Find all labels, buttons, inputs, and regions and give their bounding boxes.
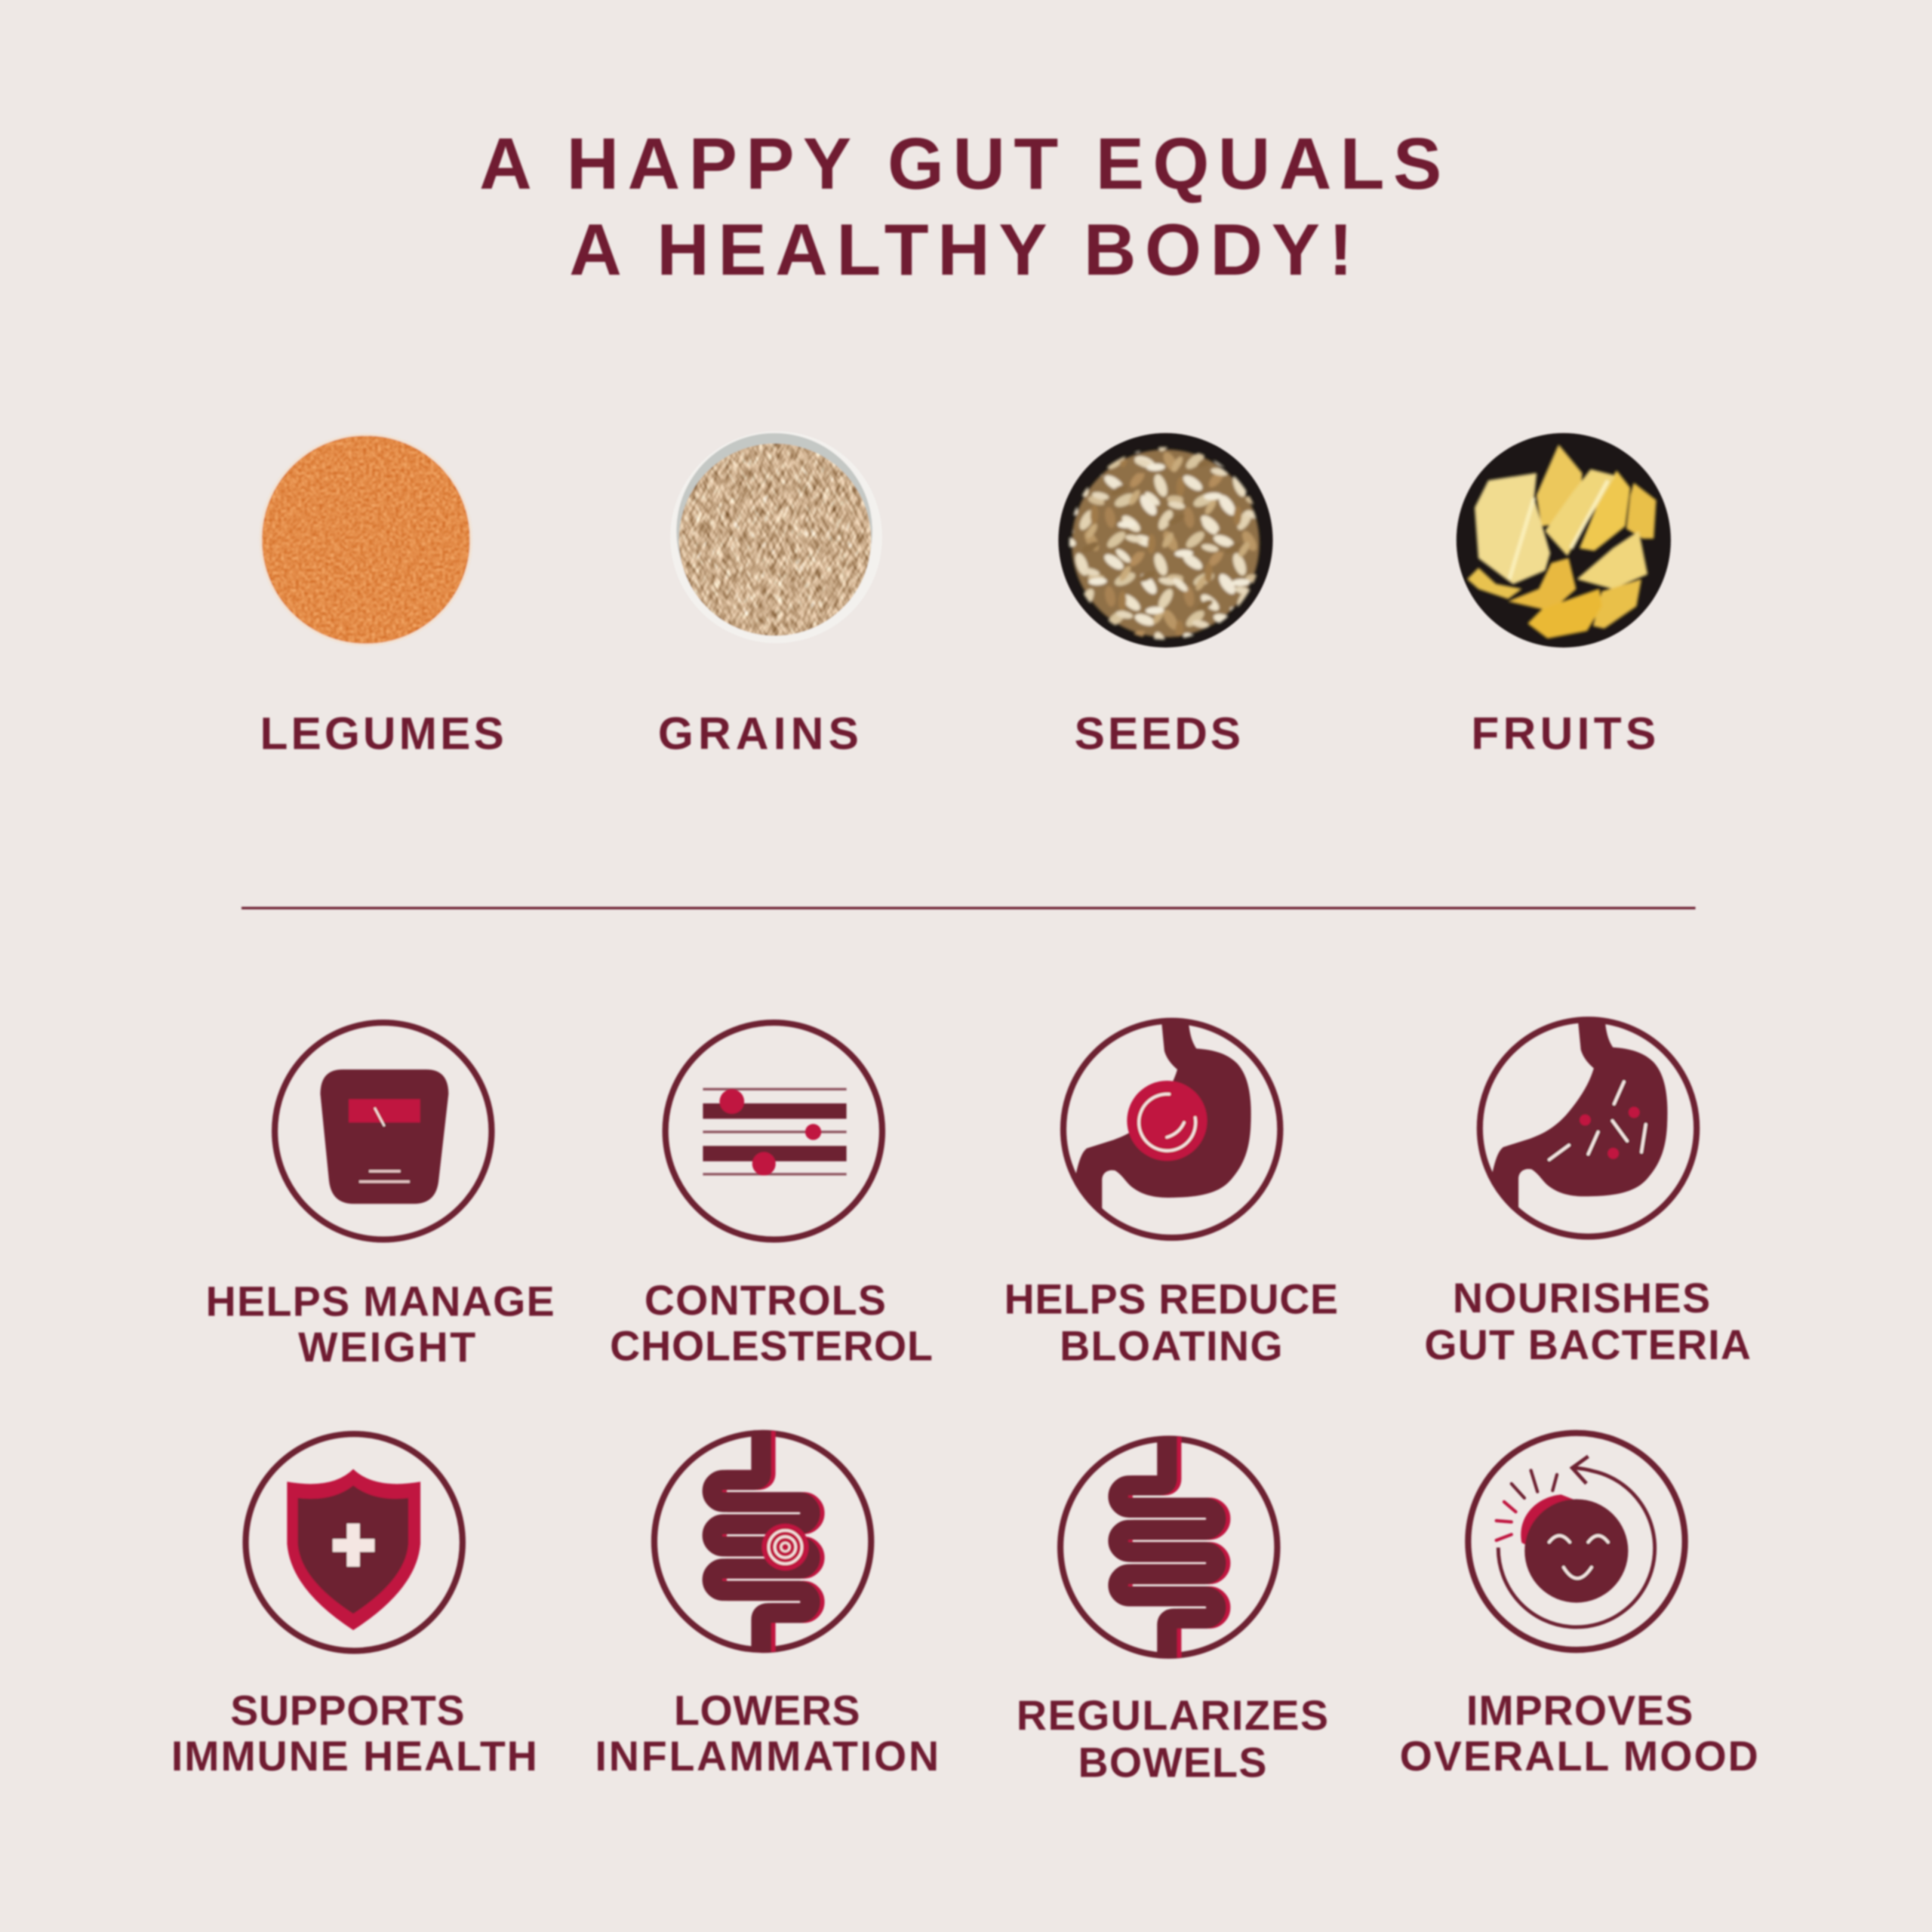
label: improves overall mood [1400,1687,1758,1780]
icon: stomach with bloating [1063,1013,1280,1238]
label: helps reduce bloating [1004,1275,1338,1369]
label: supports immune health: SUPPORTS [230,1687,465,1734]
title: A HAPPY GUT EQUALS [479,124,1441,205]
title: A HEALTHY BODY! [569,210,1353,291]
label: lowers inflammation [595,1687,939,1780]
label: nourishes gut bacteria: NOURISHES [1453,1275,1710,1321]
label: helps reduce bloating: BLOATING [1060,1322,1283,1369]
icon: stomach with gut bacteria [1480,1011,1697,1237]
food: pineapple in black bowl [1457,433,1671,648]
icon: immune shield [246,1434,463,1651]
icon: smiling face with mood arrow [1468,1433,1685,1650]
label: helps manage weight: WEIGHT [298,1324,475,1371]
label: controls cholesterol [610,1277,933,1369]
label: regularizes bowels: BOWELS [1078,1739,1266,1786]
title [479,124,1441,291]
label: fruits: FRUITS [1471,708,1656,759]
label: controls cholesterol: CHOLESTEROL [610,1322,933,1369]
food: grains in white bowl [623,389,924,692]
label: nourishes gut bacteria: GUT BACTERIA [1424,1321,1751,1368]
label: nourishes gut bacteria [1424,1275,1751,1368]
label: supports immune health [171,1687,537,1780]
label: regularizes bowels: REGULARIZES [1017,1692,1328,1739]
label: lowers inflammation: LOWERS [674,1687,860,1734]
panel: health benefits [171,1011,1758,1786]
label: lowers inflammation: INFLAMMATION [595,1733,939,1780]
icon: intestine with inflammation [654,1424,871,1658]
label: improves overall mood: IMPROVES [1466,1687,1693,1734]
label: legumes: LEGUMES [260,708,504,759]
icon: weight scale [275,1023,491,1239]
label: regularizes bowels [1017,1692,1328,1786]
panel: fibre food sources [260,389,1671,759]
icon: regular bowels [1060,1429,1277,1663]
label: helps manage weight: HELPS MANAGE [206,1278,555,1325]
icon: cholesterol arteries [666,1023,882,1239]
label: supports immune health: IMMUNE HEALTH [171,1733,537,1780]
label: improves overall mood: OVERALL MOOD [1400,1733,1758,1780]
label: controls cholesterol: CONTROLS [645,1277,886,1324]
food: legumes photo [260,433,472,646]
label: seeds: SEEDS [1075,708,1241,759]
label: helps reduce bloating: HELPS REDUCE [1004,1275,1338,1322]
food: seeds in black bowl [1058,433,1273,648]
label: helps manage weight [206,1278,555,1371]
label: grains: GRAINS [658,708,859,759]
